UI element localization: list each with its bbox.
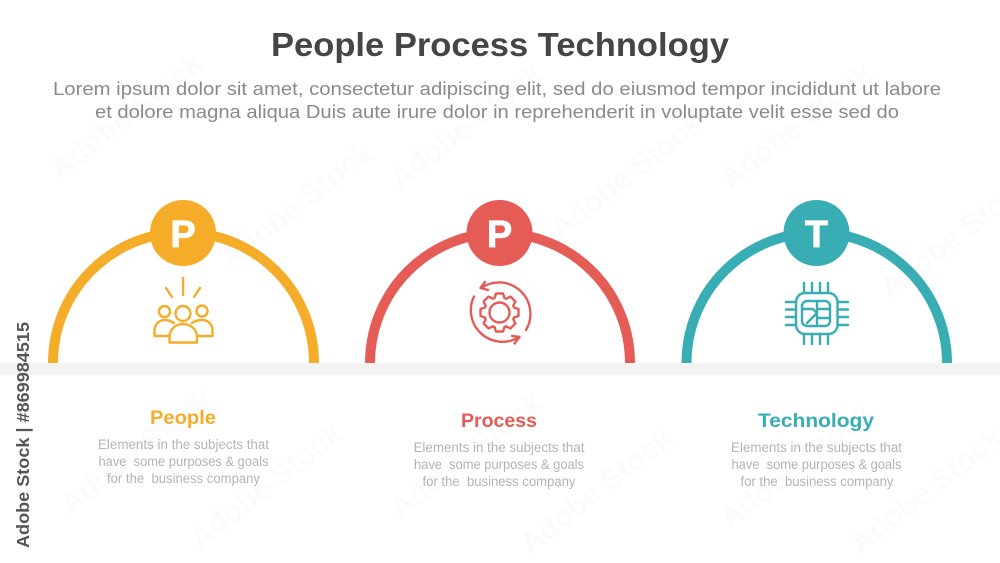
horizontal band: [0, 363, 1000, 375]
icon: gear cycle: [471, 282, 530, 344]
panel: people: [53, 200, 314, 486]
subtitle text: [53, 78, 941, 122]
watermark pattern: Adobe Stock: [54, 381, 219, 521]
description: technology: have some purposes & goals: [732, 457, 902, 472]
description: people: Elements in the subjects that: [98, 437, 269, 452]
icon: chip: [786, 283, 848, 344]
description: process: [414, 440, 585, 489]
description: process: have some purposes & goals: [414, 457, 584, 472]
watermark pattern: Adobe Stock: [214, 136, 379, 276]
watermark pattern: Adobe Stock: [384, 386, 549, 526]
description: people: [98, 437, 269, 486]
panel: process: [370, 200, 630, 489]
heading: process: Process: [461, 411, 537, 432]
description: technology: Elements in the subjects that: [731, 440, 902, 455]
badge: process: [466, 200, 532, 266]
arc: people: [53, 232, 314, 363]
description: process: Elements in the subjects that: [414, 440, 585, 455]
badge: technology: [784, 200, 850, 266]
panel: technology: [686, 200, 947, 489]
description: process: for the business company: [422, 474, 576, 489]
watermark pattern: Adobe Stock: [384, 56, 549, 196]
subtitle text: Lorem ipsum dolor sit amet, consectetur adipiscing elit, sed do eiusmod tempor incididunt ut labore: [53, 78, 941, 99]
heading: technology: Technology: [758, 411, 874, 432]
description: technology: for the business company: [740, 474, 894, 489]
badge: technology: T: [805, 214, 828, 256]
stock credit text: Adobe Stock | #869984515: [13, 322, 33, 548]
badge: process: P: [487, 214, 512, 256]
watermark pattern: Adobe Stock: [544, 106, 709, 246]
watermark pattern: Adobe Stock: [184, 416, 349, 556]
watermark pattern: Adobe Stock: [44, 46, 209, 186]
badge: people: P: [170, 214, 196, 256]
badge: people: [150, 200, 216, 266]
subtitle text: et dolore magna aliqua Duis aute irure dolor in reprehenderit in voluptate velit esse sed do: [95, 101, 899, 122]
description: people: for the business company: [107, 471, 260, 486]
watermark pattern: Adobe Stock: [714, 56, 879, 196]
description: technology: [731, 440, 902, 489]
arc: technology: [686, 233, 947, 363]
watermark pattern: Adobe Stock: [714, 396, 879, 536]
arc: process: [370, 233, 630, 363]
title: People Process Technology: [271, 26, 730, 63]
heading: people: People: [150, 408, 216, 429]
icon: people group: [154, 278, 212, 342]
description: people: have some purposes & goals: [98, 454, 269, 469]
watermark pattern: Adobe Stock: [514, 421, 679, 561]
